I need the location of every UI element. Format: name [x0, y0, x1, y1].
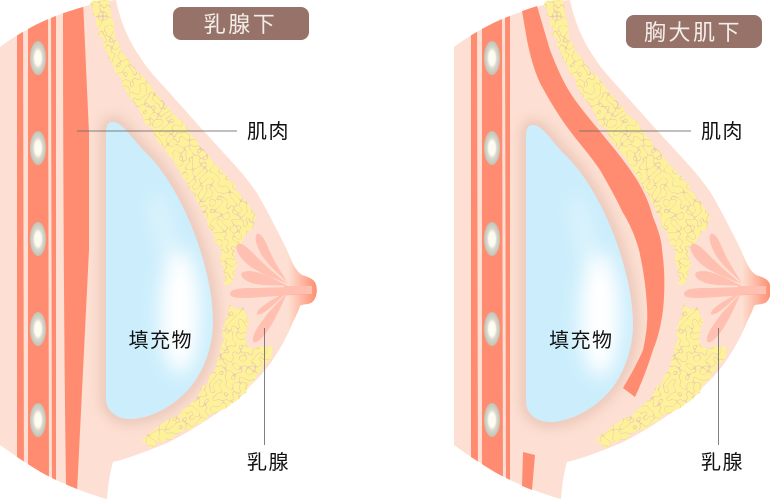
- nipple shading: [0, 0, 317, 499]
- body silhouette: [454, 0, 770, 499]
- callout line: muscle left: [77, 130, 237, 132]
- ribs: [484, 41, 500, 437]
- diagram: submuscular placement: [454, 0, 770, 500]
- lower muscle fragment: [522, 452, 535, 490]
- pectoral muscle curved: [522, 6, 664, 397]
- label: implant left: 填充物: [128, 329, 193, 352]
- heading pill: 乳腺下: [173, 7, 309, 40]
- fat tissue: [546, 2, 726, 446]
- callout line: muscle right: [579, 130, 691, 132]
- callout line: gland left: [264, 328, 266, 445]
- label: gland right: 乳腺: [701, 451, 744, 474]
- chest wall muscle stripes: [17, 0, 56, 500]
- mammary gland: [230, 234, 312, 342]
- implant: [526, 125, 633, 422]
- gland duct hub: [738, 286, 766, 294]
- label: muscle left: 肌肉: [247, 120, 290, 143]
- implant shadow: [526, 125, 633, 422]
- heading pill: 乳腺下: 乳腺下: [204, 12, 277, 37]
- label: muscle right: 肌肉: [701, 120, 744, 143]
- nipple shading: [454, 0, 770, 499]
- diagram: subglandular placement: [0, 0, 317, 500]
- heading pill: 胸大肌下: 胸大肌下: [644, 20, 742, 45]
- implant shadow: [106, 122, 213, 419]
- label: implant right: 填充物: [549, 329, 614, 352]
- chest wall muscle stripes: [471, 0, 510, 500]
- label: gland left: 乳腺: [247, 451, 290, 474]
- gland duct hub: [284, 286, 312, 294]
- heading pill: 胸大肌下: [626, 15, 762, 48]
- ribs: [30, 41, 46, 437]
- fat tissue: [92, 2, 272, 446]
- callout line: gland right: [718, 328, 720, 445]
- body silhouette: [0, 0, 317, 499]
- pectoral muscle: [63, 0, 89, 492]
- implant: [106, 122, 213, 419]
- mammary gland: [684, 234, 766, 342]
